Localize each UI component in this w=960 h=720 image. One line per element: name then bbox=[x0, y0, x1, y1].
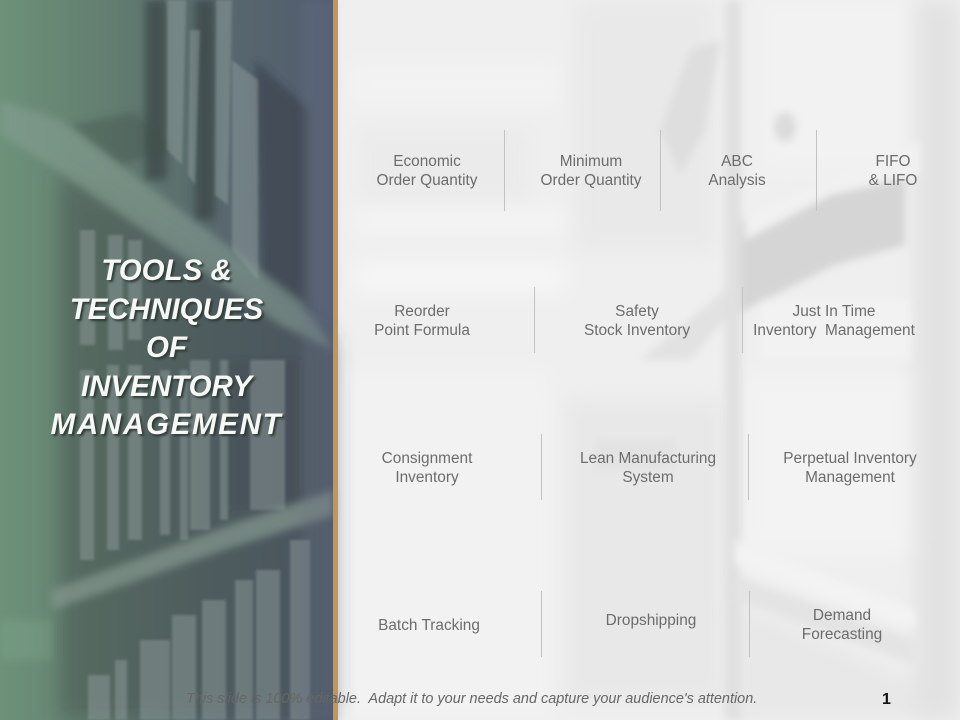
item: Lean Manufacturing System: Lean Manufacturing System bbox=[580, 450, 716, 486]
item: Perpetual Inventory Management: Perpetual Inventory Management bbox=[783, 450, 917, 486]
footer note: This slide is 100% editable. Adapt it to your needs and capture your audience's attention. bbox=[186, 691, 757, 707]
item: Economic Order Quantity: Economic Order Quantity bbox=[377, 153, 477, 189]
title bbox=[51, 254, 286, 441]
title: INVENTORY bbox=[81, 370, 252, 402]
orange divider strip bbox=[333, 0, 338, 720]
item: Consignment Inventory: Consignment Inventory bbox=[382, 450, 472, 486]
item: Dropshipping: Dropshipping bbox=[606, 612, 696, 629]
item: Demand Forecasting: Demand Forecasting bbox=[802, 607, 882, 643]
title: OF bbox=[146, 331, 187, 364]
item: Just In Time Inventory Management: Just In Time Inventory Management bbox=[753, 303, 915, 339]
item: Minimum Order Quantity: Minimum Order Quantity bbox=[541, 153, 641, 189]
title: MANAGEMENT bbox=[51, 408, 282, 441]
title: TOOLS & bbox=[101, 254, 232, 287]
item: ABC Analysis: ABC Analysis bbox=[708, 153, 766, 189]
page number: 1 bbox=[882, 691, 891, 708]
item: Reorder Point Formula: Reorder Point Formula bbox=[374, 303, 470, 339]
item: FIFO & LIFO: FIFO & LIFO bbox=[869, 153, 917, 189]
title: TECHNIQUES bbox=[70, 292, 263, 326]
item: Safety Stock Inventory: Safety Stock Inventory bbox=[584, 303, 690, 339]
item: Batch Tracking: Batch Tracking bbox=[378, 617, 480, 634]
